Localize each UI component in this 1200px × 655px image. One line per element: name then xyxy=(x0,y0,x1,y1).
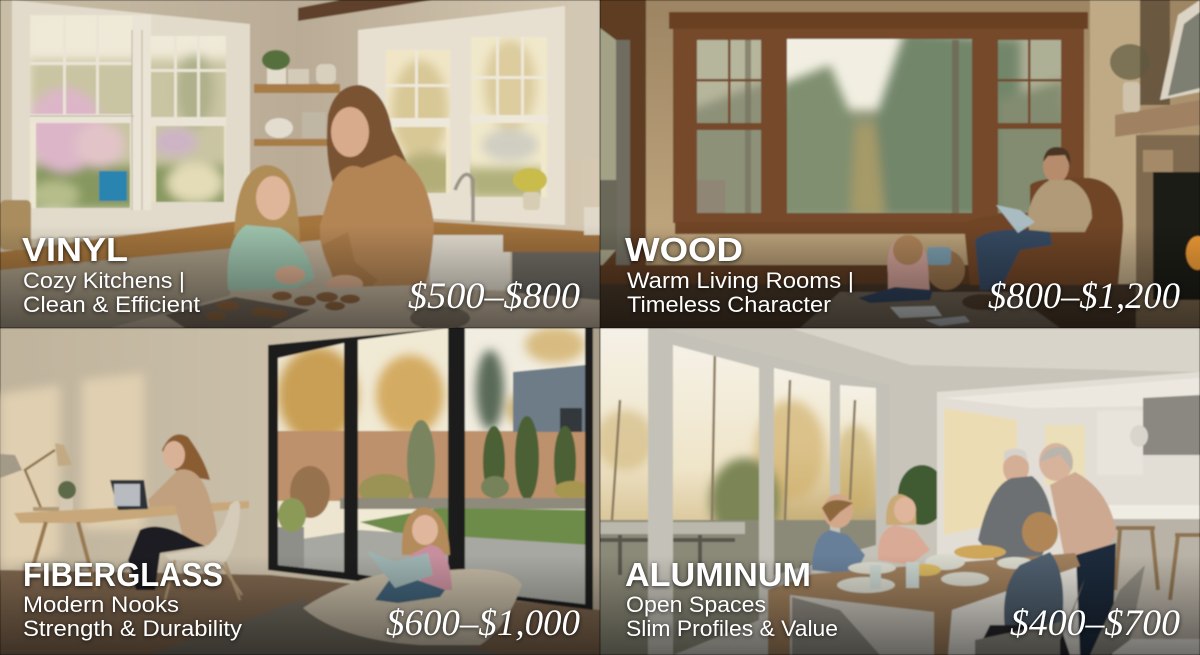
vinyl heading: VINYL xyxy=(22,231,128,268)
dining table with plates xyxy=(768,545,1080,655)
floor xyxy=(0,570,600,655)
desk xyxy=(14,501,249,590)
panel: vinyl xyxy=(0,0,600,330)
kitchen opening xyxy=(937,372,1200,655)
panel: wood xyxy=(600,0,1200,328)
sunlight patches on wall xyxy=(0,373,144,575)
fiberglass description xyxy=(23,592,242,641)
basket with blanket xyxy=(927,247,965,290)
fiberglass description: Strength & Durability xyxy=(23,616,242,641)
floor cushion xyxy=(303,569,522,645)
man reading in armchair xyxy=(962,147,1123,310)
fiberglass description: Modern Nooks xyxy=(23,592,179,617)
foreground chairs xyxy=(792,565,1145,655)
fiberglass heading: FIBERGLASS xyxy=(23,556,223,593)
plant xyxy=(898,465,946,525)
energy star label xyxy=(99,171,127,201)
wood price: $800–$1,200 xyxy=(988,276,1180,317)
vinyl description: Cozy Kitchens | xyxy=(23,268,185,293)
woman with laptop xyxy=(110,434,217,590)
boy left xyxy=(812,494,865,575)
aluminum description xyxy=(626,592,838,641)
rug xyxy=(150,600,500,655)
baseboard and floor xyxy=(600,265,1200,328)
girl drawing on floor xyxy=(858,235,970,326)
panel: aluminum xyxy=(595,328,1200,655)
corner shelves with dishes xyxy=(254,50,340,146)
open dining room scene xyxy=(595,328,1200,655)
wood countertop and cabinets xyxy=(0,215,600,328)
dark readability gradient xyxy=(600,225,1200,328)
woman baking xyxy=(320,85,434,296)
wood description: Timeless Character xyxy=(627,292,831,317)
right double-hung vinyl window xyxy=(358,6,565,225)
plant on desk xyxy=(58,481,76,511)
left patio door xyxy=(600,0,646,290)
black fiberglass sliding door xyxy=(268,327,600,610)
aluminum heading: ALUMINUM xyxy=(625,556,811,593)
fiberglass price: $600–$1,000 xyxy=(386,603,580,644)
wood heading: WOOD xyxy=(625,231,743,268)
grandfather xyxy=(978,448,1054,560)
girl at table xyxy=(878,494,930,565)
ceiling xyxy=(790,328,1200,372)
wood description: Warm Living Rooms | xyxy=(627,268,854,293)
table and cookie tray xyxy=(110,285,600,330)
ceiling beam xyxy=(298,0,432,21)
faucet and flowers xyxy=(455,168,600,235)
girl reading xyxy=(366,507,452,603)
desk lamp xyxy=(0,443,72,511)
home office nook scene xyxy=(0,327,600,655)
vinyl description: Clean & Efficient xyxy=(23,292,200,317)
kitchen scene xyxy=(0,0,600,330)
aluminum description: Open Spaces xyxy=(626,592,766,617)
aluminum description: Slim Profiles & Value xyxy=(626,616,838,641)
vinyl description xyxy=(23,268,200,317)
girl baking xyxy=(227,165,315,292)
white chair xyxy=(165,501,242,600)
glass jar xyxy=(0,200,31,250)
wood triple window xyxy=(669,12,1088,234)
left double-hung vinyl window xyxy=(12,0,250,240)
vinyl price: $500–$800 xyxy=(408,276,581,317)
living room scene xyxy=(600,0,1200,328)
fireplace and mantel xyxy=(1110,0,1200,328)
dark readability gradient xyxy=(0,555,600,655)
boy right xyxy=(975,512,1070,655)
aluminum sliding glass wall xyxy=(595,328,890,655)
panel: fiberglass xyxy=(0,327,600,655)
dark readability gradient xyxy=(0,225,600,328)
aluminum price: $400–$700 xyxy=(1010,603,1181,644)
wood description xyxy=(626,272,854,314)
grandmother xyxy=(1039,443,1117,655)
dark readability gradient xyxy=(600,555,1200,655)
